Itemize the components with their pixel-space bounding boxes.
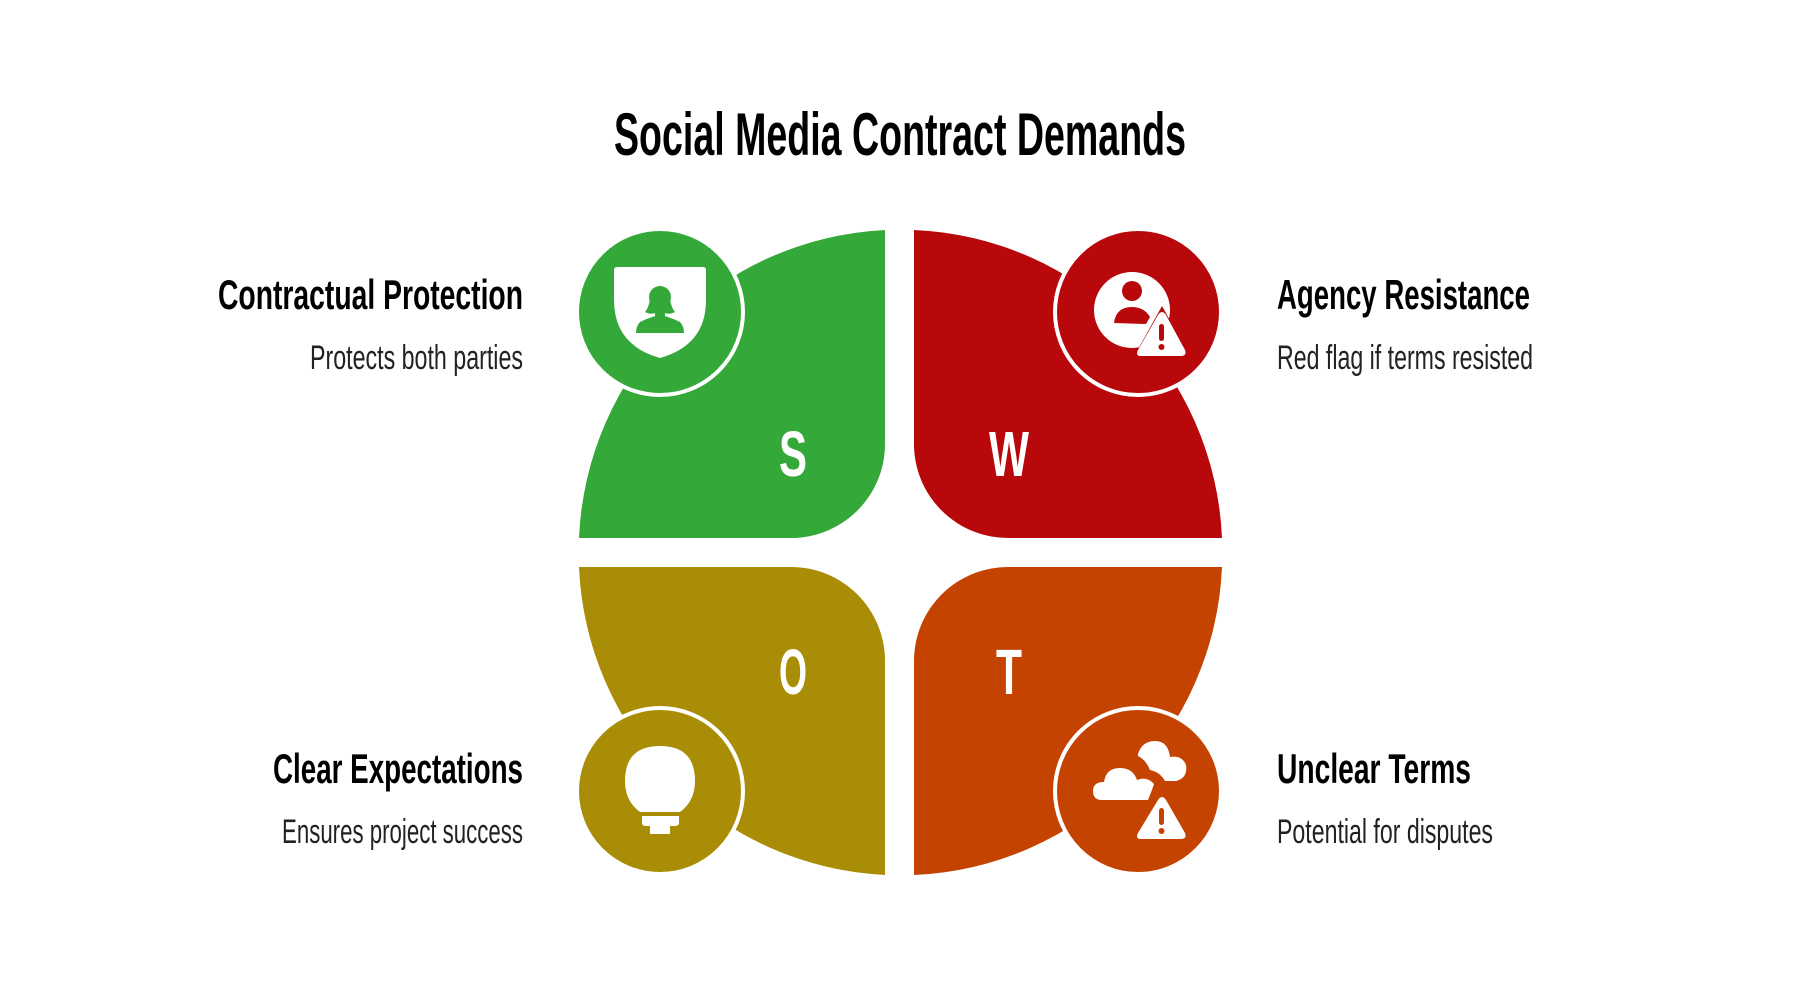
text: Clear Expectations: Ensures project success [282,813,523,851]
text: Agency Resistance [1277,271,1533,377]
panel: S strengths [579,230,885,538]
text: Agency Resistance: Agency Resistance [1277,271,1530,318]
icon: person warning [1055,229,1221,395]
letter W: W [989,418,1029,490]
text: Clear Expectations: Clear Expectations [273,745,523,792]
icon: shield person [577,229,743,395]
icon: cloud warning [1055,708,1221,874]
panel: T threats [914,567,1222,875]
title: Social Media Contract Demands [614,101,1186,168]
text: Clear Expectations [273,745,523,851]
text: Contractual Protection: Protects both parties [310,339,523,377]
letter S: S [779,418,807,490]
text: Contractual Protection [218,271,523,377]
letter O: O [779,636,807,708]
text: Contractual Protection: Contractual Protection [218,271,523,318]
icon: light bulb [577,708,743,874]
text: Unclear Terms: Unclear Terms [1277,745,1471,792]
letter T: T [996,636,1022,708]
text: Agency Resistance: Red flag if terms resisted [1277,339,1533,377]
panel: O opportunities [579,567,885,875]
text: Unclear Terms [1277,745,1493,851]
text: Unclear Terms: Potential for disputes [1277,813,1493,851]
panel: W weaknesses [914,230,1222,538]
